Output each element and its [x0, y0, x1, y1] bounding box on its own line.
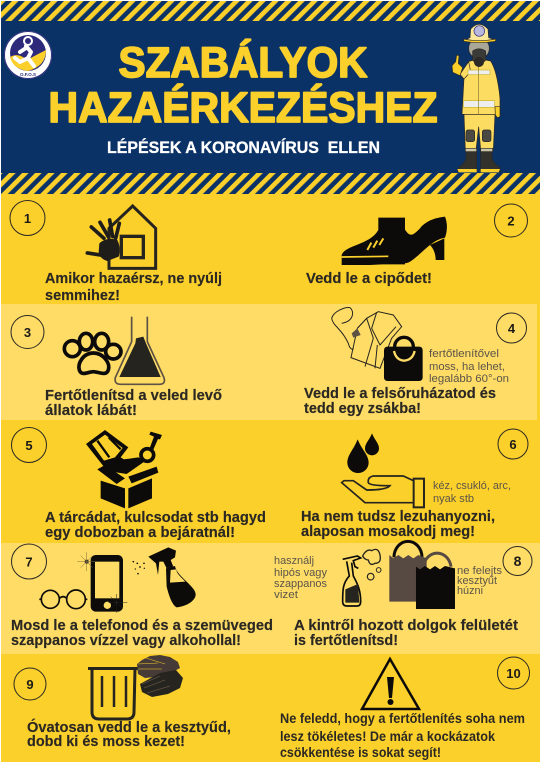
text: Ne feledd, hogy a fertőtlenítés soha nem — [280, 711, 525, 726]
panel: step 9: 9 — [26, 677, 34, 692]
note: moss, ha lehet, — [429, 361, 505, 373]
header banner — [1, 1, 540, 194]
text — [45, 388, 222, 419]
panel: step 8: 8 — [514, 553, 522, 569]
text: dobd ki és moss kezet! — [27, 734, 185, 750]
text: Óvatosan vedd le a kesztyűd, — [27, 718, 231, 736]
panel: step 4: 4 — [508, 321, 516, 336]
panel: step 3: 3 — [24, 325, 31, 340]
icon: bin — [88, 668, 138, 719]
icon: drops and hand — [342, 433, 424, 507]
text — [27, 718, 231, 750]
panel: step 6 — [301, 429, 528, 540]
note: left: hipós vagy — [274, 567, 327, 579]
icon: glasses — [39, 590, 87, 609]
panel: step 10 — [280, 657, 530, 760]
text — [301, 509, 495, 540]
note — [429, 348, 509, 385]
text: Vedd le a felsőruházatod és — [304, 386, 496, 402]
text: A kintről hozott dolgok felületét — [294, 618, 518, 634]
firefighter mascot — [452, 24, 500, 172]
text — [11, 618, 273, 649]
text: Amikor hazaérsz, ne nyúlj — [45, 271, 222, 287]
text: semmihez! — [45, 288, 120, 304]
text — [294, 618, 518, 649]
text: szappanos vízzel vagy alkohollal! — [11, 633, 241, 649]
text: Vedd le a cipődet! — [306, 271, 432, 287]
icon: paw — [64, 333, 121, 373]
note: left: szappanos — [274, 578, 327, 590]
text — [304, 386, 496, 417]
title: SZABÁLYOK — [118, 39, 368, 87]
icon: spray bottle — [132, 547, 196, 607]
icon: box with wallet and key — [86, 430, 162, 508]
panel: step 10: 10 — [506, 666, 521, 681]
icon: hand on house — [87, 206, 156, 268]
text — [45, 510, 266, 541]
text: Ha nem tudsz lezuhanyozni, — [301, 509, 495, 525]
subtitle: LÉPÉSEK A KORONAVÍRUS ELLEN — [107, 138, 380, 157]
note: legalább 60°-on — [429, 373, 509, 385]
logo — [4, 31, 52, 79]
note: right: húzni — [457, 585, 483, 597]
icon: boot and shoe — [342, 217, 447, 265]
panel: step 7: 7 — [25, 554, 33, 570]
panel: step 9 — [1, 654, 540, 762]
icon: cleaning spray — [343, 549, 381, 606]
panel: step 4 — [304, 308, 526, 417]
icon: gloves — [137, 655, 183, 697]
note: fertőtlenítővel — [429, 348, 499, 360]
panel: step 3 — [1, 304, 540, 420]
text: A tárcádat, kulcsodat stb hagyd — [45, 510, 266, 526]
text: tedd egy zsákba! — [304, 401, 421, 417]
panel: step 5 — [1, 420, 540, 543]
note: kéz, csukló, arc, — [433, 480, 511, 492]
panel: step 2: 2 — [507, 214, 515, 228]
text: Fertőtlenítsd a veled levő — [45, 388, 222, 404]
text: Mosd le a telefonod és a szemüveged — [11, 618, 273, 634]
logo: O.F.O.S — [20, 72, 36, 77]
panel: step 2 — [306, 204, 528, 287]
text: alaposan mosakodj meg! — [301, 524, 475, 540]
note: left: használj — [274, 555, 314, 567]
text: egy dobozban a bejáratnál! — [45, 525, 235, 541]
title — [48, 39, 438, 132]
text: csökkentése is sokat segít! — [280, 745, 441, 760]
text — [280, 711, 525, 760]
panel: step 6: 6 — [509, 437, 517, 452]
icon: warning triangle — [362, 659, 419, 709]
note: nyak stb — [433, 493, 474, 505]
text: is fertőtlenítsd! — [294, 633, 398, 649]
note: left: vizet — [274, 589, 298, 601]
icon: phone — [77, 552, 127, 613]
icon: clothes and bag — [332, 308, 423, 381]
text: állatok lábát! — [45, 403, 137, 419]
text: lesz tökéletes! De már a kockázatok — [280, 729, 495, 744]
note: right: kesztyűt — [457, 575, 497, 587]
panel: step 1 — [1, 194, 540, 304]
panel: step 8 — [274, 541, 532, 649]
panel: step 5: 5 — [25, 438, 33, 453]
note: left — [274, 555, 327, 601]
note — [433, 480, 511, 505]
panel: step 1: 1 — [24, 211, 31, 226]
title: HAZAÉRKEZÉSHEZ — [48, 84, 438, 132]
note: right: ne felejts — [457, 565, 503, 577]
text — [45, 271, 222, 304]
panel: step 7 — [1, 543, 540, 654]
note: right — [457, 565, 503, 597]
icon: shopping bags — [389, 541, 455, 609]
icon: flask — [115, 317, 164, 384]
